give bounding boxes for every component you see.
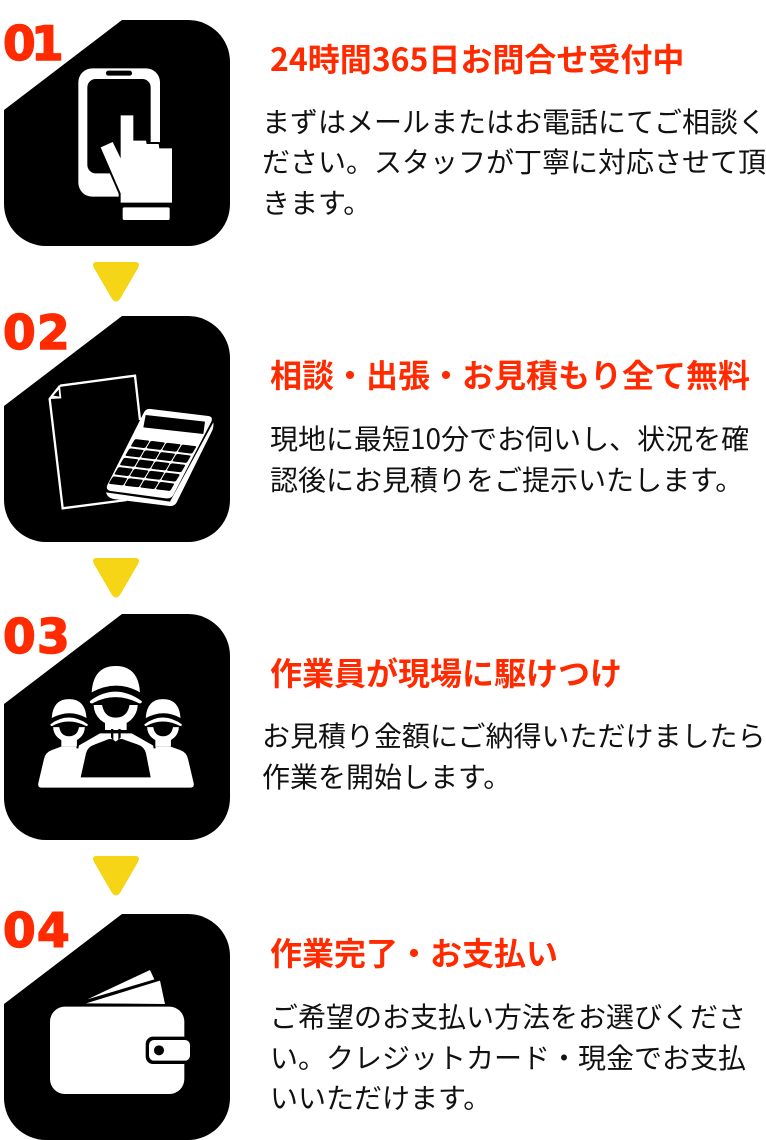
arrow: step 2 to 3 (93, 558, 139, 598)
text: step 2 description (270, 418, 749, 498)
text: step 4 description: い。クレジットカード・現金でお支払 (270, 1036, 746, 1076)
icon: three workers in caps (38, 666, 194, 788)
text: step 3 description (262, 715, 765, 796)
heading: step 1: 24時間365日お問合せ受付中 (270, 35, 684, 81)
text: step 2 description: 認後にお見積りをご提示いたします。 (270, 458, 743, 498)
panel: step 1 (3, 17, 230, 246)
arrow: step 3 to 4 (93, 856, 139, 896)
heading: step 4: 作業完了・お支払い (270, 929, 558, 975)
panel: step 4 (3, 904, 230, 1140)
text: step 4 description: ご希望のお支払い方法をお選びくださ (270, 996, 746, 1036)
icon: document and calculator (50, 376, 213, 508)
panel: step 2 (3, 306, 230, 542)
text: step 4 description (270, 996, 746, 1117)
black cut-corner tile 1 (4, 20, 230, 246)
black cut-corner tile 4 (4, 914, 230, 1140)
black cut-corner tile 3 (4, 614, 230, 840)
arrow: step 1 to 2 (93, 262, 139, 302)
step number 02: 02 (3, 306, 70, 361)
icon: wallet with cards (50, 970, 191, 1094)
text: step 1 description: ださい。スタッフが丁寧に対応させて頂 (262, 141, 766, 181)
text: step 1 description (262, 100, 766, 222)
text: step 2 description: 現地に最短10分でお伺いし、状況を確 (270, 418, 749, 458)
text: step 3 description: お見積り金額にご納得いただけましたら (262, 715, 765, 755)
black cut-corner tile 2 (4, 316, 230, 542)
panel: step 3 (3, 610, 230, 840)
heading: step 2: 相談・出張・お見積もり全て無料 (270, 351, 750, 397)
step number 01: 01 (3, 17, 64, 72)
text: step 1 description: きます。 (262, 182, 371, 222)
step number 04: 04 (3, 904, 70, 959)
text: step 4 description: いいただけます。 (270, 1077, 491, 1117)
step number 03: 03 (3, 610, 70, 665)
text: step 3 description: 作業を開始します。 (262, 756, 511, 796)
heading: step 3: 作業員が現場に駆けつけ (270, 649, 622, 695)
icon: hand tapping smartphone (78, 68, 172, 220)
text: step 1 description: まずはメールまたはお電話にてご相談く (262, 100, 766, 140)
